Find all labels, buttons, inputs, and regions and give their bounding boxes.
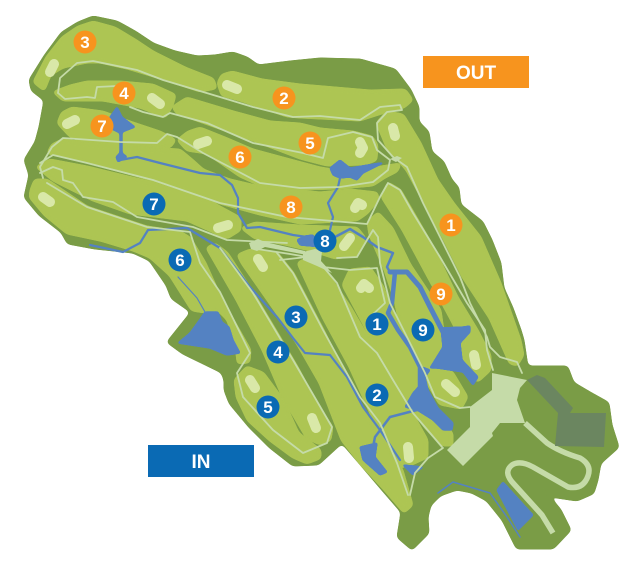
pond: IN 6 [178, 312, 240, 355]
fairway: IN 8 [242, 223, 365, 258]
marker: OUT 6 [228, 146, 252, 168]
marker: IN 2 [366, 384, 388, 406]
marker: IN 9 [412, 318, 434, 342]
fairway: OUT 1 [377, 112, 523, 365]
building [527, 375, 606, 447]
pond: entrance [497, 482, 533, 530]
marker: IN 3 [284, 306, 308, 328]
fairways [30, 22, 523, 512]
marker: OUT 1: 1 [446, 216, 456, 235]
clubhouse plaza [447, 373, 527, 466]
stream: right of IN 8 [335, 229, 393, 272]
marker: OUT 3: 3 [80, 33, 90, 52]
label: OUT: OUT [456, 63, 496, 84]
pond: OUT 7 [108, 107, 135, 162]
marker: IN 9: 9 [418, 321, 428, 340]
pond: IN 2 [403, 465, 423, 475]
cart paths [40, 61, 522, 495]
marker: IN 8: 8 [320, 232, 330, 251]
OUT hole markers [74, 30, 462, 306]
cart path hubs [249, 156, 402, 273]
marker: OUT 4: 4 [119, 84, 129, 103]
marker: IN 5 [256, 396, 280, 418]
marker: IN 2: 2 [372, 386, 382, 405]
stream: IN 6 [178, 277, 205, 312]
fairway: OUT 4 [54, 82, 175, 117]
marker: OUT 9 [430, 282, 452, 306]
stream: across IN 2 [373, 410, 417, 447]
marker: OUT 8 [280, 196, 302, 218]
stream: to OUT 5 pond [328, 178, 340, 230]
stream: OUT centre [120, 157, 307, 237]
fairway: OUT 2 [218, 72, 412, 120]
sand bunkers [43, 64, 476, 458]
fairway: OUT 7 [58, 108, 175, 148]
fairway: IN 9 [368, 213, 467, 408]
marker: IN 4: 4 [273, 343, 283, 362]
marker: OUT 5: 5 [305, 134, 315, 153]
fairway: OUT 8 [48, 140, 378, 223]
marker: IN 3: 3 [291, 308, 301, 327]
stream: into OUT 9 pond [390, 272, 443, 332]
entrance road [508, 423, 589, 533]
IN hole markers [142, 192, 434, 418]
pond: OUT 9 [430, 326, 478, 385]
marker: OUT 3 [74, 30, 96, 54]
label: IN [148, 445, 254, 477]
stream: entrance [438, 482, 520, 537]
label: IN: IN [192, 452, 210, 473]
marker: IN 6 [168, 248, 192, 272]
marker: OUT 2: 2 [279, 89, 289, 108]
fairway: IN 3 [238, 250, 412, 512]
fairway: OUT 6 [178, 128, 400, 189]
marker: IN 7 [142, 192, 166, 216]
marker: IN 8 [314, 230, 336, 252]
fairway: OUT 3 [34, 22, 216, 91]
fairway: IN 5 [235, 367, 320, 463]
water features [90, 107, 533, 537]
marker: OUT 7 [90, 114, 114, 138]
marker: IN 1 [366, 312, 388, 336]
marker: IN 5: 5 [263, 398, 273, 417]
fairway: IN 1 [343, 268, 452, 445]
marker: OUT 5 [298, 132, 322, 154]
fairway: OUT 9 [382, 183, 490, 381]
stream: main [90, 228, 400, 460]
pond: IN 8 [297, 235, 322, 247]
fairway: IN 7 [37, 160, 240, 238]
fairway: IN 2 [298, 257, 427, 467]
marker: OUT 7: 7 [97, 117, 107, 136]
pond: OUT 5 [330, 160, 383, 180]
fairway: OUT 5 [173, 98, 377, 165]
label: OUT [423, 56, 529, 88]
marker: IN 4 [266, 340, 290, 364]
pond: IN 3 [360, 443, 387, 475]
fairway: IN 4 [207, 244, 332, 444]
marker: OUT 4 [112, 82, 136, 104]
marker: OUT 9: 9 [436, 285, 446, 304]
marker: IN 1: 1 [372, 315, 382, 334]
fairway: IN 6 [30, 180, 250, 363]
marker: OUT 2 [272, 86, 296, 110]
pond: IN 9 [405, 367, 453, 430]
marker: OUT 8: 8 [286, 198, 296, 217]
marker: OUT 1 [440, 214, 462, 236]
stream: IN 1 side [388, 272, 420, 387]
marker: IN 7: 7 [149, 195, 159, 214]
marker: OUT 6: 6 [235, 148, 245, 167]
marker: IN 6: 6 [175, 251, 185, 270]
